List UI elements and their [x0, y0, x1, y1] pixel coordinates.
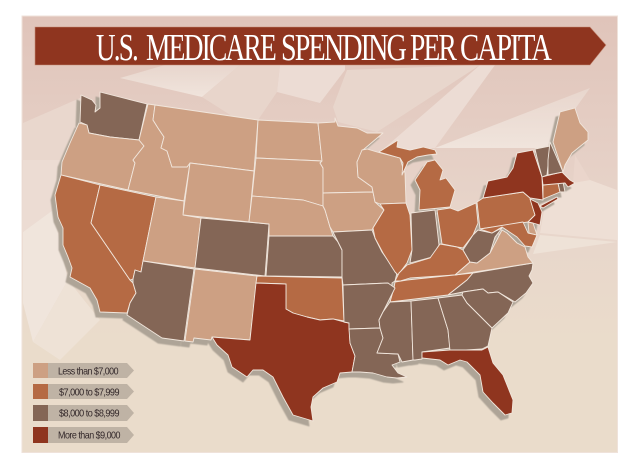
state: Vermont [535, 146, 550, 177]
state: Virginia [455, 230, 533, 275]
state: Texas [212, 283, 355, 421]
legend item: $8,000 to $8,999: $8,000 to $8,999 [59, 408, 120, 420]
state: Montana [153, 105, 258, 171]
state: Nevada [91, 185, 156, 280]
state: North Carolina [448, 263, 533, 302]
state: Louisiana [349, 328, 407, 378]
state: Wisconsin [357, 149, 406, 204]
state: Wyoming [183, 163, 254, 222]
state: Iowa [323, 192, 384, 232]
state: Florida [422, 347, 513, 415]
state: Tennessee [390, 273, 473, 302]
state: Maryland [480, 222, 537, 247]
state: California [55, 175, 136, 313]
state: Massachusetts [542, 172, 575, 187]
state: Missouri [333, 230, 397, 288]
state: Ohio [437, 203, 478, 248]
state: Minnesota [318, 118, 383, 193]
title: MEDICARE [146, 27, 276, 69]
state: West Virginia [463, 228, 502, 263]
state: Rhode Island [558, 182, 565, 192]
state: Connecticut [543, 183, 560, 199]
state: Utah [143, 197, 201, 268]
state: Mississippi [377, 301, 413, 362]
state: Arkansas [343, 283, 395, 329]
state: New York [483, 150, 543, 200]
state: Illinois [373, 203, 412, 275]
state: Oklahoma [256, 276, 344, 321]
state: Kentucky [395, 244, 470, 281]
state: Idaho [128, 104, 190, 201]
state: Georgia [438, 295, 492, 351]
legend item: $7,000 to $7,999: $7,000 to $7,999 [59, 386, 120, 398]
state: Delaware [528, 222, 537, 235]
title: U.S. [96, 27, 137, 69]
legend [33, 363, 134, 443]
title: PER [410, 27, 457, 69]
state: North Dakota [256, 120, 322, 161]
state: South Carolina [462, 289, 513, 328]
state: Maine [553, 108, 588, 172]
state: Michigan lower peninsula [415, 160, 455, 210]
state: Indiana [410, 210, 439, 263]
state: New Hampshire [548, 142, 563, 175]
state: Nebraska [249, 196, 333, 236]
state: Washington [80, 92, 147, 140]
state: New Mexico [185, 269, 257, 342]
title [96, 27, 552, 69]
state: Colorado [195, 218, 269, 276]
state: Kansas [266, 236, 342, 277]
state: South Dakota [252, 158, 323, 206]
title: SPENDING [281, 27, 407, 69]
state: Oregon [61, 123, 144, 190]
state: New York, Long Island [540, 197, 558, 208]
state: Arizona [127, 261, 194, 341]
title: CAPITA [460, 27, 552, 69]
state: New Jersey [528, 199, 542, 225]
legend item: more than $9,000: More than $9,000 [58, 430, 121, 442]
state: Pennsylvania [477, 192, 535, 229]
legend item: less than $7,000: Less than $7,000 [58, 366, 119, 378]
title banner [35, 27, 606, 69]
state: Alabama [411, 298, 450, 360]
state: Michigan upper peninsula [379, 140, 437, 175]
map: United States by Medicare spending [55, 92, 588, 421]
